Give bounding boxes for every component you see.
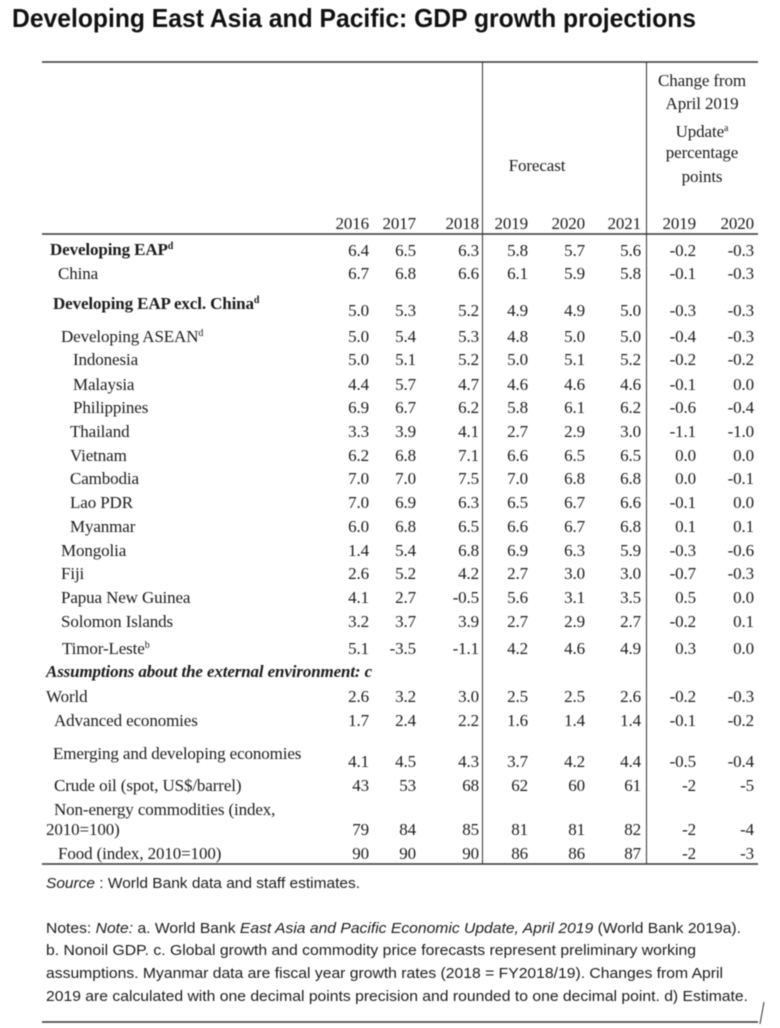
row: Malaysia: 5.7 (395, 375, 417, 394)
row: Crude oil: -5 (740, 776, 754, 795)
row: Thailand (70, 422, 754, 441)
row: Fiji: -0.7 (670, 564, 697, 583)
row: Papua New Guinea: -0.5 (453, 588, 479, 607)
row: Timor-Leste: 5.1 (348, 639, 369, 658)
row: Food: -3 (740, 844, 754, 863)
row: Advanced economies: 1.4 (564, 711, 586, 730)
year header row: 2016 (335, 214, 369, 233)
row: Vietnam: 6.8 (395, 446, 416, 465)
row: Emerging and developing economies: 4.1 (348, 752, 369, 771)
row: Lao PDR: -0.1 (670, 493, 696, 512)
row: Advanced economies: 1.6 (507, 711, 528, 730)
row: Papua New Guinea: Papua New Guinea (61, 588, 191, 607)
data table (42, 62, 758, 864)
row: Developing EAP excl. China: -0.3 (728, 301, 754, 320)
row: World: World (46, 687, 88, 706)
row: Non-energy commodities: 81 (511, 820, 528, 839)
row: China: 6.7 (348, 264, 370, 283)
row: World: -0.3 (728, 687, 754, 706)
row: Fiji: Fiji (61, 564, 85, 583)
row: Thailand: 3.9 (395, 422, 416, 441)
row: Solomon Islands: 0.1 (733, 612, 754, 631)
row: Lao PDR: Lao PDR (70, 493, 134, 512)
row: Emerging and developing economies: -0.5 (670, 752, 696, 771)
row: Emerging and developing economies: 4.2 (564, 752, 585, 771)
row: Mongolia: 6.8 (458, 541, 479, 560)
row: China: China (58, 264, 99, 283)
row: Papua New Guinea: 5.6 (507, 588, 528, 607)
row: Fiji: 4.2 (458, 564, 479, 583)
row: Non-energy commodities: -4 (740, 820, 755, 839)
row: Developing ASEAN: 5.0 (348, 327, 369, 346)
row: Mongolia: 6.9 (507, 541, 528, 560)
row: Solomon Islands: 3.7 (395, 612, 417, 631)
row: Malaysia: 0.0 (733, 375, 754, 394)
row: Mongolia: Mongolia (61, 541, 127, 560)
change-from heading (658, 71, 746, 186)
row: Advanced economies: Advanced economies (54, 711, 198, 730)
row: Developing ASEAN: 5.4 (395, 327, 417, 346)
row: Crude oil: -2 (682, 776, 696, 795)
row: Developing EAP: d (168, 241, 174, 252)
row: Philippines: 6.7 (395, 398, 417, 417)
row: Vietnam: 6.6 (507, 446, 528, 465)
row: Timor-Leste: -1.1 (453, 639, 479, 658)
row: Developing ASEAN: 4.8 (507, 327, 528, 346)
row: Philippines: 6.1 (564, 398, 585, 417)
row: Timor-Leste (62, 639, 754, 658)
row: Indonesia: 5.1 (395, 350, 416, 369)
row: Vietnam: 6.5 (564, 446, 585, 465)
row: Crude oil (54, 776, 754, 795)
row: Emerging and developing economies: 4.3 (458, 752, 479, 771)
row: Papua New Guinea: 2.7 (395, 588, 417, 607)
row: Fiji: 2.6 (348, 564, 369, 583)
row: Timor-Leste: 0.3 (675, 639, 696, 658)
row: Non-energy commodities: Non-energy commodities (index, (54, 800, 275, 819)
row: Crude oil: 62 (511, 776, 528, 795)
row: Lao PDR: 0.0 (733, 493, 754, 512)
row: Developing EAP excl. China: 5.0 (620, 301, 641, 320)
row: Developing ASEAN: d (198, 328, 203, 339)
change-from heading: Change from (658, 71, 746, 90)
row: Solomon Islands: Solomon Islands (61, 612, 173, 631)
row: Developing EAP excl. China (53, 294, 754, 320)
row: Timor-Leste: b (145, 640, 150, 651)
row: Developing EAP: Developing EAP (50, 240, 168, 259)
row: Emerging and developing economies: 4.5 (395, 752, 416, 771)
row: Food: Food (index, 2010=100) (58, 844, 221, 863)
row: Non-energy commodities (46, 800, 755, 839)
year header row: 2017 (382, 214, 417, 233)
row: World: 3.2 (395, 687, 416, 706)
row: Developing EAP: -0.3 (728, 241, 754, 260)
row: Developing EAP excl. China: 5.3 (395, 301, 416, 320)
row: China: 5.9 (564, 264, 585, 283)
year header row: 2020 (551, 214, 585, 233)
row: Developing EAP: 5.8 (507, 241, 528, 260)
row: World: 3.0 (458, 687, 479, 706)
row: Food: 86 (568, 844, 585, 863)
row: Developing EAP (50, 240, 754, 260)
row: China: -0.1 (670, 264, 696, 283)
row: Myanmar: 6.0 (348, 517, 369, 536)
row: Philippines: Philippines (73, 398, 148, 417)
row: World: -0.2 (670, 687, 696, 706)
row: Developing EAP: 6.4 (348, 241, 370, 260)
row: Lao PDR (70, 493, 754, 512)
row: Non-energy commodities: 85 (462, 820, 479, 839)
row: Solomon Islands: -0.2 (670, 612, 696, 631)
title: Developing East Asia and Pacific: GDP growth projections (12, 3, 696, 33)
row: Philippines: 6.2 (620, 398, 641, 417)
row: Myanmar: 0.1 (675, 517, 696, 536)
row: Vietnam: Vietnam (70, 446, 127, 465)
row: Developing ASEAN: Developing ASEAN (61, 327, 198, 346)
row: Advanced economies: 2.2 (458, 711, 479, 730)
row: Timor-Leste: 4.6 (564, 639, 585, 658)
row: Lao PDR: 6.6 (620, 493, 641, 512)
row: Thailand: 2.7 (507, 422, 529, 441)
row: Timor-Leste: 0.0 (733, 639, 754, 658)
row: Cambodia: 6.8 (620, 469, 641, 488)
row: Myanmar: 6.6 (507, 517, 528, 536)
row: Indonesia: 5.0 (348, 350, 369, 369)
row: Non-energy commodities: 79 (352, 820, 369, 839)
row: Emerging and developing economies: Emerging and developing economies (53, 744, 301, 763)
row: Solomon Islands: 2.7 (507, 612, 529, 631)
row: Food: 90 (399, 844, 416, 863)
row: Developing ASEAN: 5.0 (620, 327, 641, 346)
row: World (46, 687, 754, 706)
row: Cambodia: 7.5 (458, 469, 479, 488)
row: Philippines: -0.4 (728, 398, 755, 417)
row: Myanmar: 0.1 (733, 517, 754, 536)
row: Advanced economies: -0.1 (670, 711, 696, 730)
year header row: 2019 (662, 214, 696, 233)
row: Indonesia (73, 350, 754, 369)
row: Non-energy commodities: 82 (624, 820, 641, 839)
row: Indonesia: 5.1 (564, 350, 585, 369)
change-from heading: a (724, 123, 729, 134)
row: Developing EAP excl. China: 4.9 (507, 301, 528, 320)
row: Fiji (61, 564, 754, 583)
row: Timor-Leste: 4.9 (620, 639, 641, 658)
row: Developing EAP: 6.3 (458, 241, 479, 260)
row: World: 2.6 (348, 687, 369, 706)
row: Thailand: -1.0 (728, 422, 754, 441)
row: Fiji: 5.2 (395, 564, 416, 583)
notes: 2019 are calculated with one decimal points precision and rounded to one decimal point. d) Estimate. (46, 989, 748, 1005)
row: Malaysia: 4.6 (620, 375, 641, 394)
row: Malaysia: Malaysia (73, 375, 135, 394)
row: Malaysia: 4.7 (458, 375, 480, 394)
row: Solomon Islands (61, 612, 754, 631)
row: Indonesia: 5.2 (620, 350, 641, 369)
row: Crude oil: Crude oil (spot, US$/barrel) (54, 776, 241, 795)
row: Mongolia: 5.9 (620, 541, 641, 560)
row: Advanced economies: 1.4 (620, 711, 642, 730)
row: Thailand: 3.0 (620, 422, 641, 441)
row: Thailand: 2.9 (564, 422, 585, 441)
row: Vietnam (70, 446, 754, 465)
row: Non-energy commodities: 2010=100) (46, 820, 120, 839)
source note: Source : World Bank data and staff estimates. (46, 876, 360, 892)
row: Lao PDR: 6.9 (395, 493, 416, 512)
row: Solomon Islands: 2.7 (620, 612, 642, 631)
row: Philippines: 6.2 (458, 398, 479, 417)
row: Cambodia: Cambodia (70, 469, 139, 488)
row: Developing EAP: -0.2 (670, 241, 696, 260)
row: Indonesia: -0.2 (670, 350, 696, 369)
row: Indonesia: 5.0 (507, 350, 528, 369)
row: Mongolia: 5.4 (395, 541, 417, 560)
row: Developing ASEAN: -0.3 (728, 327, 754, 346)
row: Timor-Leste: -3.5 (390, 639, 416, 658)
row: Food: 87 (624, 844, 642, 863)
row: Vietnam: 6.2 (348, 446, 369, 465)
change-from heading: April 2019 (666, 94, 738, 113)
row: Myanmar: 6.8 (620, 517, 641, 536)
row: China: 6.8 (395, 264, 416, 283)
change-from heading: percentage (666, 143, 738, 162)
row: Developing EAP excl. China: 5.2 (458, 301, 479, 320)
year header row: 2019 (494, 214, 528, 233)
row: Advanced economies (54, 711, 754, 730)
row: China: 6.6 (458, 264, 479, 283)
row: Developing EAP excl. China: 5.0 (348, 301, 369, 320)
row: Solomon Islands: 2.9 (564, 612, 585, 631)
row: Vietnam: 6.5 (620, 446, 641, 465)
row: Non-energy commodities: 81 (568, 820, 585, 839)
row: Vietnam: 0.0 (675, 446, 696, 465)
notes: b. Nonoil GDP. c. Global growth and commodity price forecasts represent preliminary working (46, 943, 696, 959)
row: Myanmar: 6.5 (458, 517, 479, 536)
row: Vietnam: 0.0 (733, 446, 754, 465)
row: Cambodia: -0.1 (728, 469, 754, 488)
row: China (58, 264, 754, 283)
row: Philippines (73, 398, 755, 417)
row: Fiji: -0.3 (728, 564, 754, 583)
row: Myanmar (70, 517, 754, 536)
row: Emerging and developing economies: 3.7 (507, 752, 529, 771)
row: Developing ASEAN: 5.0 (564, 327, 585, 346)
row: Cambodia: 7.0 (395, 469, 416, 488)
row: Papua New Guinea (61, 588, 754, 607)
row: World: 2.6 (620, 687, 641, 706)
row: Cambodia: 7.0 (348, 469, 369, 488)
row: Mongolia: 6.3 (564, 541, 585, 560)
row: Cambodia (70, 469, 754, 488)
row: Developing EAP excl. China: 4.9 (564, 301, 585, 320)
row: World: 2.5 (564, 687, 585, 706)
row: Philippines: 6.9 (348, 398, 369, 417)
row: Developing ASEAN (61, 327, 754, 346)
notes: Notes: Note: a. World Bank East Asia and Pacific Economic Update, April 2019 (World Bank 2019a). (46, 921, 741, 937)
row: Food: 86 (511, 844, 528, 863)
row: Advanced economies: 2.4 (395, 711, 417, 730)
row: Myanmar: Myanmar (70, 517, 136, 536)
row: Developing ASEAN: -0.4 (670, 327, 697, 346)
row: Food (58, 844, 754, 863)
row: Advanced economies: 1.7 (348, 711, 370, 730)
row: Lao PDR: 6.5 (507, 493, 528, 512)
row: Emerging and developing economies: -0.4 (728, 752, 755, 771)
row: Papua New Guinea: 0.5 (675, 588, 696, 607)
row: Malaysia: 4.4 (348, 375, 370, 394)
row: Crude oil: 60 (568, 776, 585, 795)
row: Cambodia: 6.8 (564, 469, 585, 488)
row: Philippines: 5.8 (507, 398, 528, 417)
row: Myanmar: 6.7 (564, 517, 586, 536)
notes: assumptions. Myanmar data are fiscal year growth rates (2018 = FY2018/19). Changes from April (46, 966, 723, 982)
row: Lao PDR: 6.3 (458, 493, 479, 512)
row: Emerging and developing economies (53, 744, 755, 771)
notes (46, 921, 748, 1005)
row: Crude oil: 43 (352, 776, 369, 795)
row: Emerging and developing economies: 4.4 (620, 752, 642, 771)
assumptions subheading: Assumptions about the external environment: c (45, 662, 373, 681)
row: Crude oil: 53 (399, 776, 416, 795)
row: Vietnam: 7.1 (458, 446, 479, 465)
row: Developing EAP excl. China: -0.3 (670, 301, 696, 320)
row: Food: -2 (682, 844, 696, 863)
year header row: 2021 (607, 214, 641, 233)
row: Philippines: -0.6 (670, 398, 696, 417)
row: Thailand: 4.1 (458, 422, 479, 441)
row: China: 5.8 (620, 264, 641, 283)
row: China: 6.1 (507, 264, 528, 283)
year header row: 2018 (445, 214, 479, 233)
row: Mongolia: -0.6 (728, 541, 754, 560)
row: Thailand: 3.3 (348, 422, 369, 441)
row: Fiji: 3.0 (620, 564, 641, 583)
year header row: 2020 (720, 214, 754, 233)
row: Solomon Islands: 3.2 (348, 612, 369, 631)
row: Thailand: Thailand (70, 422, 130, 441)
change-from heading: Update (676, 122, 724, 141)
row: Malaysia: -0.1 (670, 375, 696, 394)
row: Papua New Guinea: 4.1 (348, 588, 369, 607)
row: Timor-Leste: 4.2 (507, 639, 528, 658)
row: Myanmar: 6.8 (395, 517, 416, 536)
forecast heading: Forecast (509, 156, 566, 175)
row: China: -0.3 (728, 264, 754, 283)
row: Developing EAP excl. China: Developing EAP excl. China (53, 294, 254, 313)
row: Developing EAP: 6.5 (395, 241, 416, 260)
row: Food: 90 (462, 844, 479, 863)
row: Fiji: 2.7 (507, 564, 529, 583)
row: Timor-Leste: Timor-Leste (62, 639, 145, 658)
row: Advanced economies: -0.2 (728, 711, 754, 730)
year header row (335, 214, 754, 233)
row: Indonesia: Indonesia (73, 350, 139, 369)
row: Lao PDR: 7.0 (348, 493, 369, 512)
row: Non-energy commodities: 84 (399, 820, 417, 839)
row: Indonesia: 5.2 (458, 350, 479, 369)
row: Crude oil: 68 (462, 776, 479, 795)
row: Indonesia: -0.2 (728, 350, 754, 369)
row: Fiji: 3.0 (564, 564, 585, 583)
row: Mongolia (61, 541, 754, 560)
row: Cambodia: 7.0 (507, 469, 528, 488)
row: Malaysia: 4.6 (564, 375, 585, 394)
row: Non-energy commodities: -2 (682, 820, 696, 839)
change-from heading: points (682, 167, 722, 186)
row: World: 2.5 (507, 687, 528, 706)
row: Developing EAP: 5.7 (564, 241, 586, 260)
row: Developing EAP excl. China: d (254, 295, 260, 306)
row: Mongolia: 1.4 (348, 541, 370, 560)
row: Solomon Islands: 3.9 (458, 612, 479, 631)
row: Papua New Guinea: 3.5 (620, 588, 641, 607)
row: Malaysia (73, 375, 754, 394)
row: Developing ASEAN: 5.3 (458, 327, 479, 346)
row: Malaysia: 4.6 (507, 375, 528, 394)
row: Crude oil: 61 (624, 776, 641, 795)
row: Lao PDR: 6.7 (564, 493, 586, 512)
row: Thailand: -1.1 (670, 422, 696, 441)
row: Food: 90 (352, 844, 369, 863)
row: Papua New Guinea: 3.1 (564, 588, 585, 607)
row: Cambodia: 0.0 (675, 469, 696, 488)
row: Mongolia: -0.3 (670, 541, 696, 560)
row: Papua New Guinea: 0.0 (733, 588, 754, 607)
row: Developing EAP: 5.6 (620, 241, 641, 260)
